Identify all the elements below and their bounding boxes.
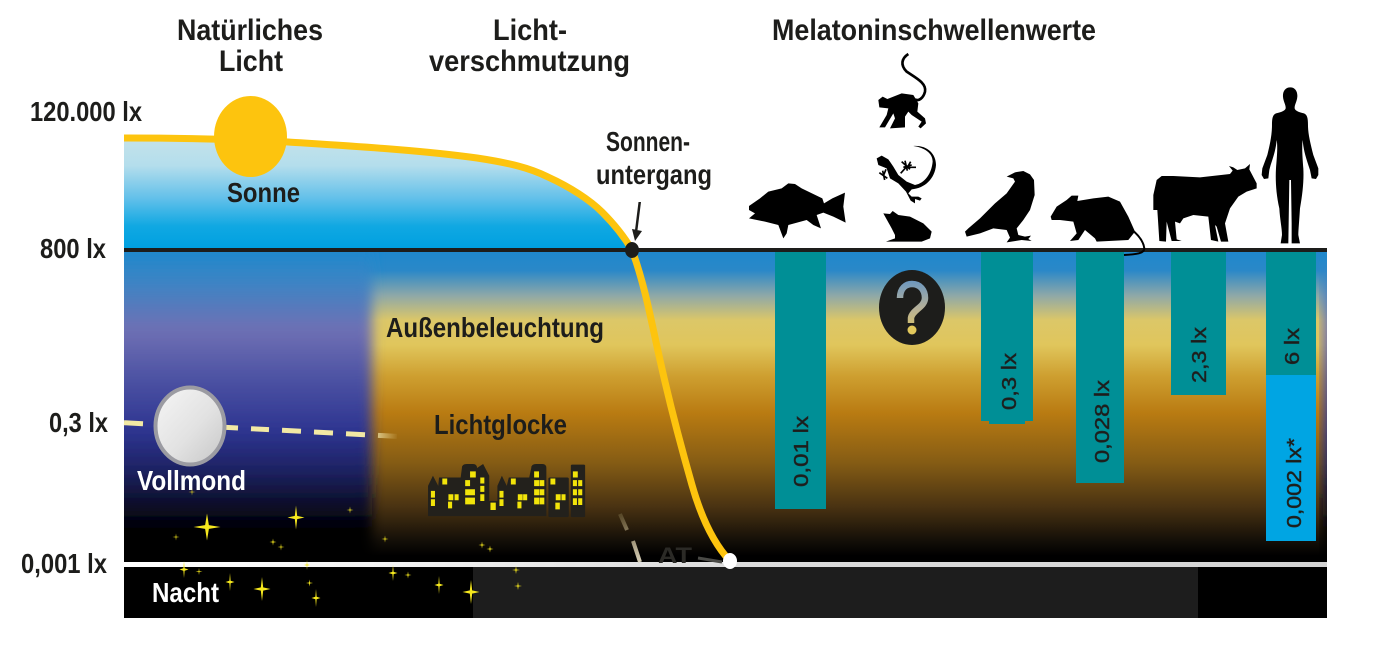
stars [172, 488, 522, 607]
animal silhouettes [749, 54, 1318, 255]
artificial twilight dashes [620, 514, 640, 562]
axis labels: 800 lx [40, 233, 106, 264]
icon: full moon [156, 388, 224, 464]
sunset marker dot [625, 242, 639, 258]
icon: city skyline [428, 464, 585, 517]
label: Vollmond: Vollmond [137, 465, 246, 496]
bar: cow threshold: 2,3 lx [1189, 327, 1211, 383]
moonlight dashed line [124, 423, 397, 436]
panel: night ground strip [124, 567, 1327, 618]
title: Natürliches Licht [177, 14, 323, 78]
axis labels [21, 96, 142, 579]
axis labels: 120.000 lx [30, 96, 142, 127]
icon: gecko [877, 146, 936, 203]
icon: sun [214, 96, 287, 177]
label: Sonnenuntergang: untergang [596, 159, 712, 190]
title: Lichtverschmutzung [429, 14, 630, 78]
panel: right edge tint [1319, 276, 1327, 546]
bar: rat threshold [1076, 252, 1124, 483]
panel: night sky background [124, 252, 1327, 562]
panel: natural night without light pollution [124, 269, 382, 550]
icon: cow [1153, 164, 1257, 242]
bar: fish threshold: 0,01 lx [791, 416, 813, 487]
bar: cow threshold [1171, 252, 1226, 395]
bar: human threshold: 0,002 lx* [1284, 438, 1306, 528]
icon: raven [965, 171, 1035, 242]
sun light curve [124, 138, 730, 561]
night end dot [723, 553, 737, 569]
icon: fish [749, 183, 846, 238]
bar: rat threshold: 0,028 lx [1092, 380, 1114, 463]
label: Sonnenuntergang [596, 126, 712, 190]
icon: frog [883, 211, 932, 242]
horizon line 0,001 lx [124, 562, 1327, 567]
title: Natürliches Licht: Licht [219, 45, 283, 78]
axis labels: 0,3 lx [49, 407, 108, 438]
icon: question mark [879, 270, 945, 345]
icon: rat [1051, 196, 1144, 255]
label: Nacht: Nacht [152, 577, 219, 608]
title: Natürliches Licht: Natürliches [177, 14, 323, 47]
panel: daylight sky [124, 138, 632, 250]
bar: bird threshold: 0,3 lx [999, 353, 1021, 410]
bar: human threshold: 6 lx [1282, 328, 1304, 365]
label: Außenbeleuchtung: Außenbeleuchtung [386, 312, 604, 343]
label: Lichtglocke: Lichtglocke [434, 409, 567, 440]
label: Sonne: Sonne [227, 177, 300, 208]
axis labels: 0,001 lx [21, 548, 107, 579]
label: AT: AT [658, 543, 693, 568]
title: Melatoninschwellenwerte: Melatoninschwellenwerte [772, 14, 1096, 47]
bar: bird threshold [981, 252, 1033, 424]
title: Lichtverschmutzung: Licht- [493, 14, 567, 47]
arrow to white dot [698, 558, 722, 562]
bar: human threshold [1266, 252, 1316, 541]
bar: fish threshold [775, 252, 826, 509]
label: Sonnenuntergang: Sonnen- [606, 126, 690, 157]
icon: monkey [878, 54, 926, 128]
800 lx line [124, 248, 1327, 252]
arrow: sunset [632, 202, 642, 241]
icon: human [1262, 87, 1318, 243]
title: Lichtverschmutzung: verschmutzung [429, 45, 630, 78]
